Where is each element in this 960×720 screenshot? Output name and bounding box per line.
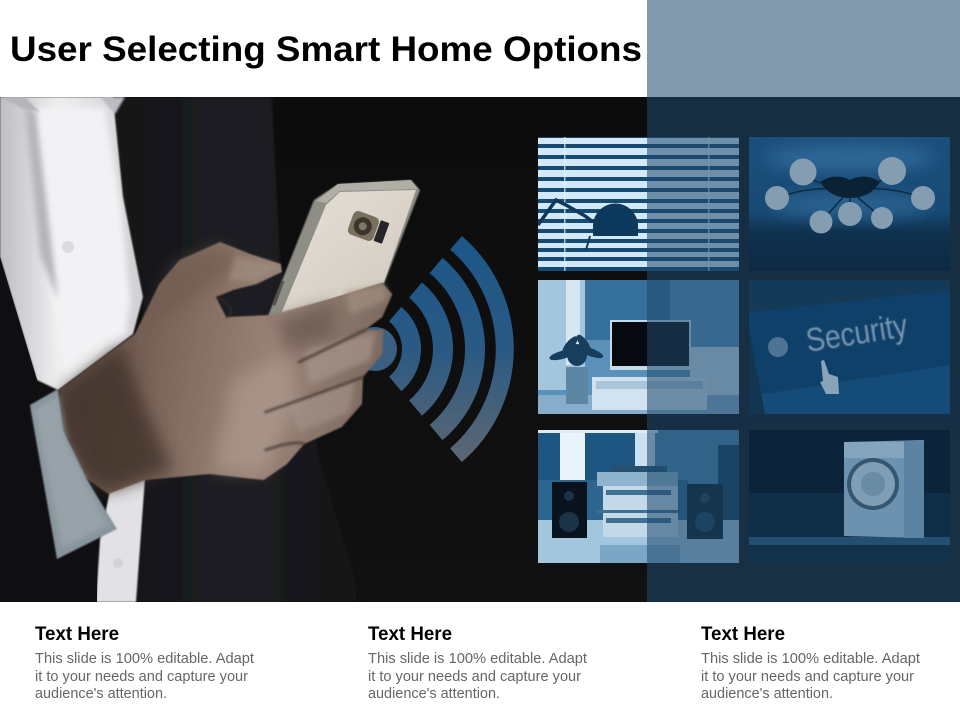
text block 1: Text Here [35, 624, 119, 645]
text block 2: Text Here [368, 624, 452, 645]
panel: stereo system [538, 430, 739, 563]
desk lamp [538, 200, 638, 250]
smartphone [268, 180, 420, 316]
hand cursor icon [820, 360, 839, 394]
panel: living room with TV [538, 280, 739, 414]
photo: man holding smartphone [0, 97, 960, 602]
chandelier [765, 157, 935, 234]
text block 1: audience's attention. [35, 686, 167, 702]
text block 3: This slide is 100% editable. Adapt [701, 651, 920, 667]
left sleeve [0, 257, 97, 602]
panel: ceiling light [749, 137, 950, 271]
speakers [552, 482, 723, 539]
blue overlay column [647, 0, 960, 602]
amplifier stack [597, 466, 678, 537]
washer [844, 440, 924, 538]
shirt cuff [30, 389, 117, 559]
wifi signal icon [353, 243, 505, 455]
potted plant [548, 333, 605, 404]
jacket [116, 97, 320, 602]
hand [59, 242, 392, 494]
text block 2: it to your needs and capture your [368, 669, 581, 685]
text block 1: it to your needs and capture your [35, 669, 248, 685]
text block 3: audience's attention. [701, 686, 833, 702]
television [610, 320, 691, 370]
text block 3 [701, 624, 920, 702]
text block 1 [35, 624, 254, 702]
panel: security screen [749, 280, 950, 414]
text block 1: This slide is 100% editable. Adapt [35, 651, 254, 667]
text block 2 [368, 624, 587, 702]
text block 2: audience's attention. [368, 686, 500, 702]
security text: Security [803, 306, 910, 359]
panel: window blinds [538, 137, 739, 271]
shirt [0, 97, 145, 602]
camera [348, 211, 390, 244]
panel: washing machine [749, 430, 950, 545]
text block 3: Text Here [701, 624, 785, 645]
text block 2: This slide is 100% editable. Adapt [368, 651, 587, 667]
title: User Selecting Smart Home Options [10, 30, 642, 69]
text block 3: it to your needs and capture your [701, 669, 914, 685]
